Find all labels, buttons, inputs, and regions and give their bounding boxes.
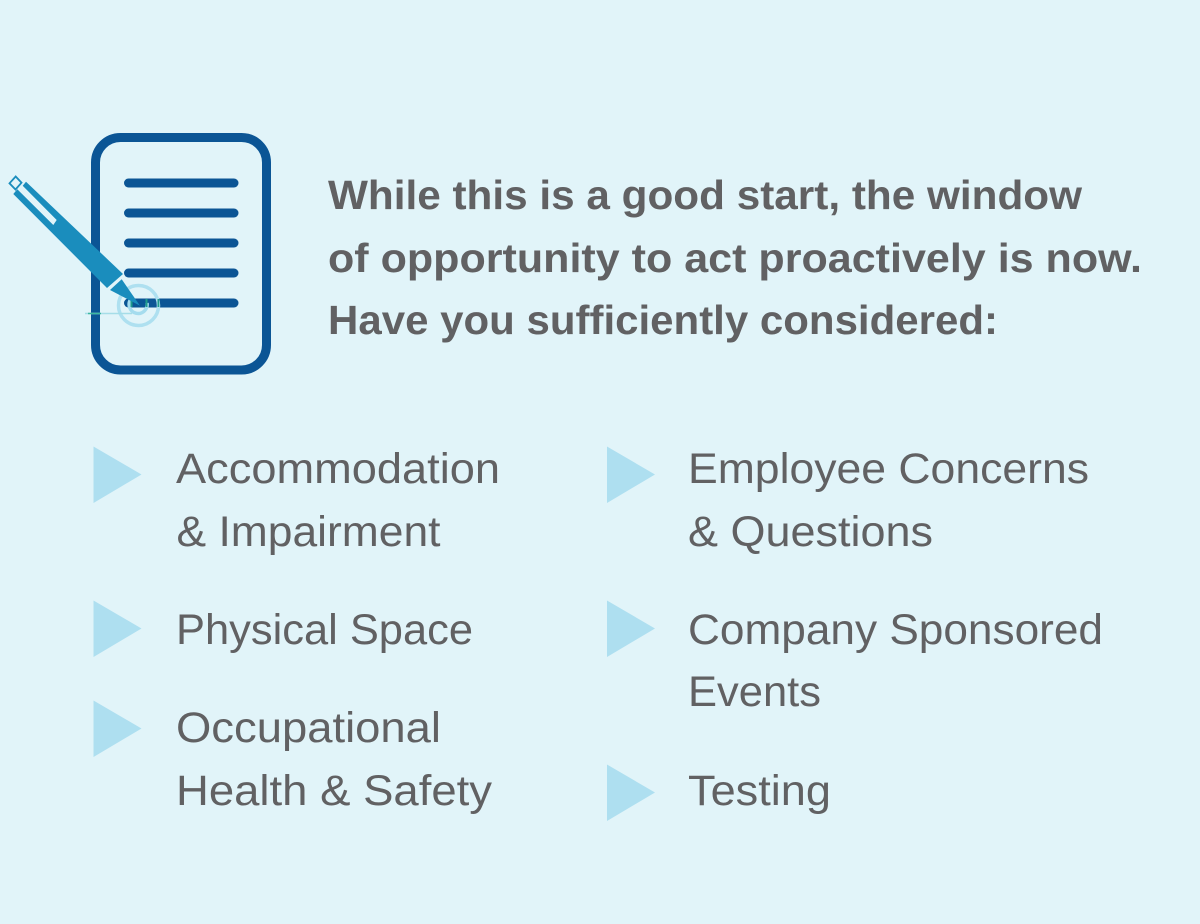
- list item: Company Sponsored Events: Events: [688, 668, 821, 716]
- icon: signature swirl: [85, 286, 159, 326]
- list item: Accommodation & Impairment: Accommodation: [176, 445, 500, 493]
- list item: Physical Space: [94, 600, 473, 657]
- list item: Company Sponsored Events: Company Sponsored: [688, 606, 1103, 654]
- list item: Occupational Health & Safety: Health & Safety: [176, 767, 493, 815]
- heading: [328, 172, 1142, 343]
- icon: pen: [10, 176, 140, 306]
- list item: Testing: [607, 764, 831, 821]
- heading: While this is a good start, the window: [328, 172, 1082, 218]
- icon: document text lines: [128, 183, 234, 303]
- list item: Accommodation & Impairment: [94, 445, 500, 556]
- heading: of opportunity to act proactively is now.: [328, 235, 1142, 281]
- list item: Employee Concerns & Questions: & Questions: [688, 508, 933, 556]
- list item: Company Sponsored Events: [607, 600, 1103, 716]
- icon: document outline: [96, 138, 266, 370]
- list item: Employee Concerns & Questions: [607, 445, 1089, 556]
- list item: Employee Concerns & Questions: Employee Concerns: [688, 445, 1089, 493]
- heading: Have you sufficiently considered:: [328, 297, 998, 343]
- list item: Occupational Health & Safety: Occupational: [176, 704, 441, 752]
- icon: document with pen: [10, 138, 266, 370]
- list item: Occupational Health & Safety: [94, 700, 493, 815]
- list item: Accommodation & Impairment: & Impairment: [176, 508, 441, 556]
- list item: Physical Space: Physical Space: [176, 606, 473, 654]
- list item: Testing: Testing: [688, 767, 831, 815]
